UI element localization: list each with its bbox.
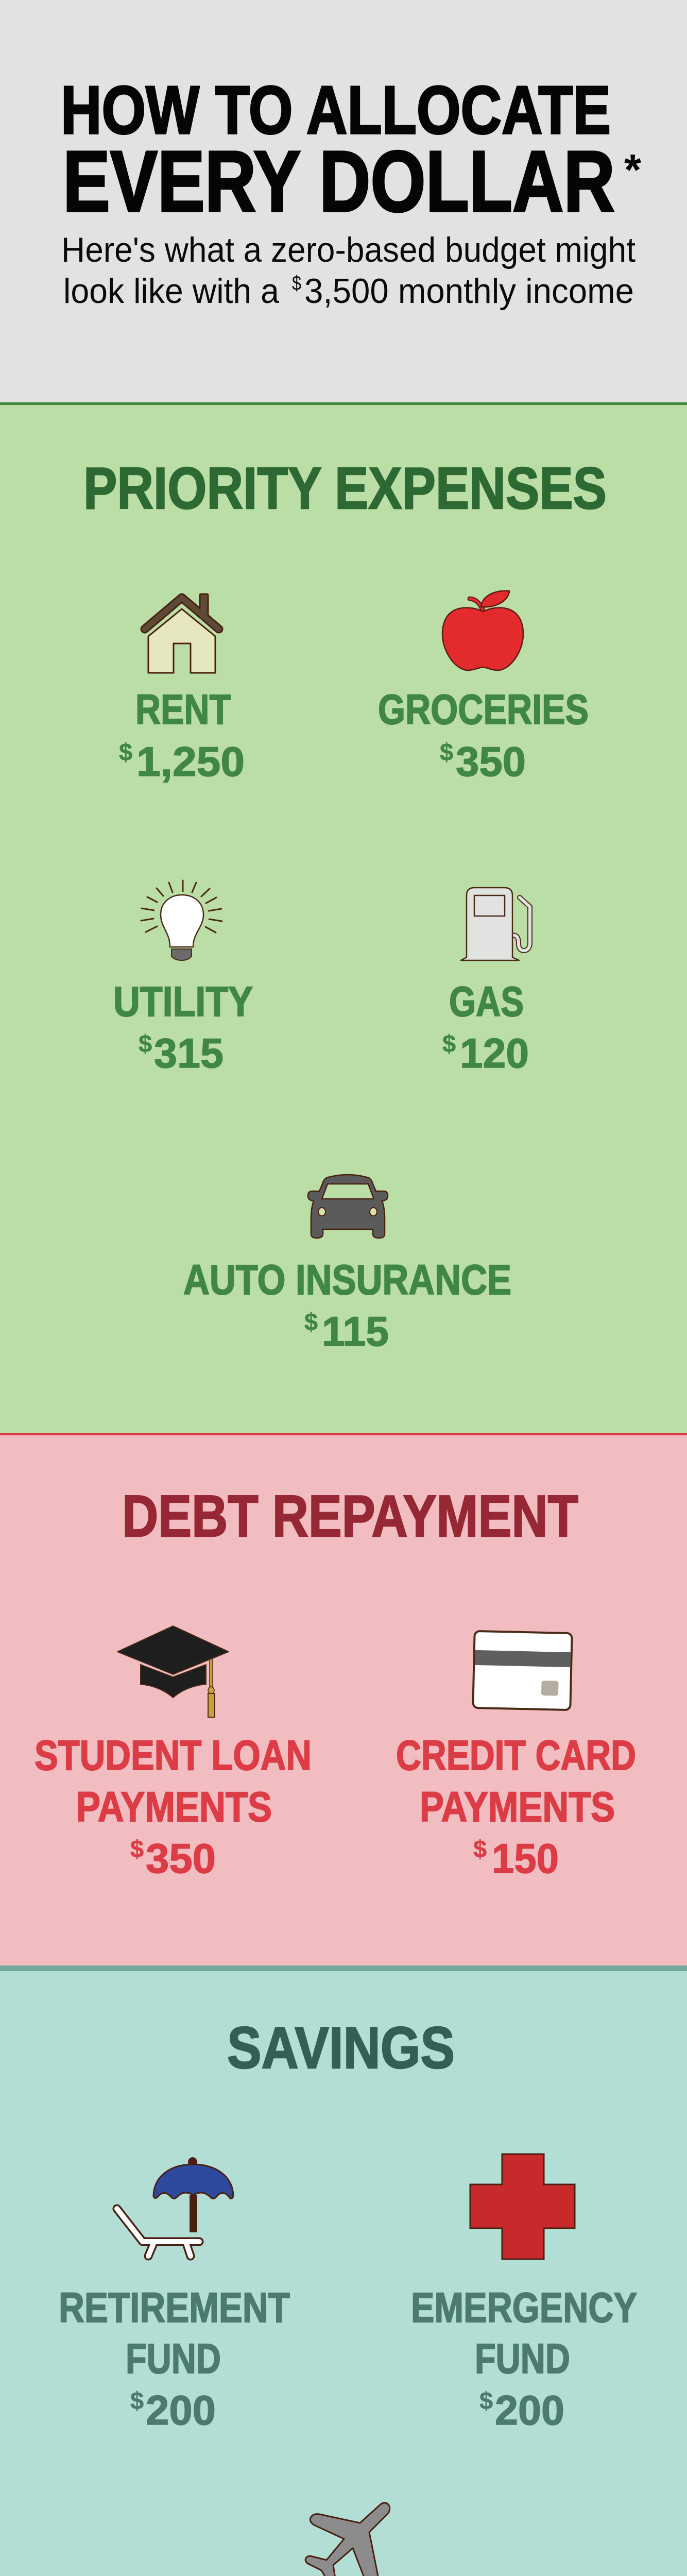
item: student loan payments: [35, 1626, 312, 1882]
panel: header: [0, 0, 687, 402]
icon: medical cross: [470, 2154, 575, 2259]
item: emergency fund: [411, 2154, 637, 2434]
title: [61, 72, 641, 230]
item: student loan payments: STUDENT LOAN: [35, 1732, 312, 1779]
item: groceries: $: [440, 738, 453, 766]
item: travel fund: [214, 2503, 459, 2576]
item: utility: UTILITY: [113, 978, 253, 1025]
item: credit card payments: PAYMENTS: [420, 1784, 615, 1831]
item: emergency fund: EMERGENCY: [411, 2284, 637, 2331]
item: rent: 1,250: [136, 739, 245, 785]
item: utility: [113, 880, 253, 1077]
item: credit card payments: 150: [492, 1836, 559, 1882]
item: student loan payments: PAYMENTS: [76, 1784, 272, 1831]
panel: debt repayment: [0, 1433, 687, 1965]
item: auto insurance: 115: [322, 1309, 389, 1355]
item: credit card payments: CREDIT CARD: [396, 1732, 636, 1779]
subtitle: [61, 230, 636, 311]
icon: car: [308, 1175, 388, 1238]
item: rent: RENT: [135, 686, 231, 733]
item: retirement fund: [59, 2157, 290, 2434]
icon: airplane: [305, 2503, 390, 2576]
item: emergency fund: 200: [495, 2387, 564, 2434]
item: gas: $: [442, 1030, 456, 1057]
item: utility: $: [139, 1030, 152, 1057]
heading: priority expenses: PRIORITY EXPENSES: [83, 456, 607, 521]
icon: beach chair and umbrella: [117, 2157, 233, 2256]
item: gas: GAS: [449, 978, 524, 1025]
item: auto insurance: $: [304, 1308, 318, 1335]
subtitle: look like with a: [63, 272, 279, 311]
icon: credit card: [473, 1631, 572, 1710]
item: auto insurance: [183, 1175, 511, 1355]
item: retirement fund: 200: [146, 2387, 216, 2434]
icon: graduation cap: [117, 1626, 229, 1717]
heading: savings: SAVINGS: [227, 2015, 455, 2081]
item: rent: [119, 594, 245, 785]
panel: priority expenses: [0, 402, 687, 1433]
item: rent: $: [119, 738, 132, 766]
item: gas: 120: [460, 1030, 529, 1077]
heading: debt repayment: DEBT REPAYMENT: [122, 1484, 578, 1549]
title: *: [624, 146, 641, 195]
subtitle: 3,500 monthly income: [304, 272, 634, 311]
item: retirement fund: $: [130, 2387, 144, 2414]
item: student loan payments: $: [130, 1835, 144, 1862]
item: gas: [442, 888, 530, 1077]
item: student loan payments: 350: [146, 1836, 216, 1882]
item: groceries: GROCERIES: [378, 686, 589, 733]
item: retirement fund: FUND: [126, 2335, 221, 2382]
item: groceries: 350: [456, 739, 526, 785]
item: credit card payments: [396, 1631, 636, 1882]
item: emergency fund: $: [479, 2387, 493, 2414]
item: auto insurance: AUTO INSURANCE: [183, 1257, 511, 1303]
item: utility: 315: [154, 1030, 224, 1077]
item: emergency fund: FUND: [475, 2335, 570, 2382]
item: credit card payments: $: [473, 1835, 487, 1862]
item: retirement fund: RETIREMENT: [59, 2284, 290, 2331]
subtitle: $: [292, 272, 301, 295]
panel: savings: [0, 1965, 687, 2576]
icon: light bulb: [141, 880, 222, 960]
item: groceries: [378, 591, 589, 785]
icon: house: [145, 594, 219, 673]
subtitle: Here's what a zero-based budget might: [61, 230, 636, 269]
icon: gas pump: [461, 888, 530, 960]
icon: apple: [442, 591, 523, 670]
